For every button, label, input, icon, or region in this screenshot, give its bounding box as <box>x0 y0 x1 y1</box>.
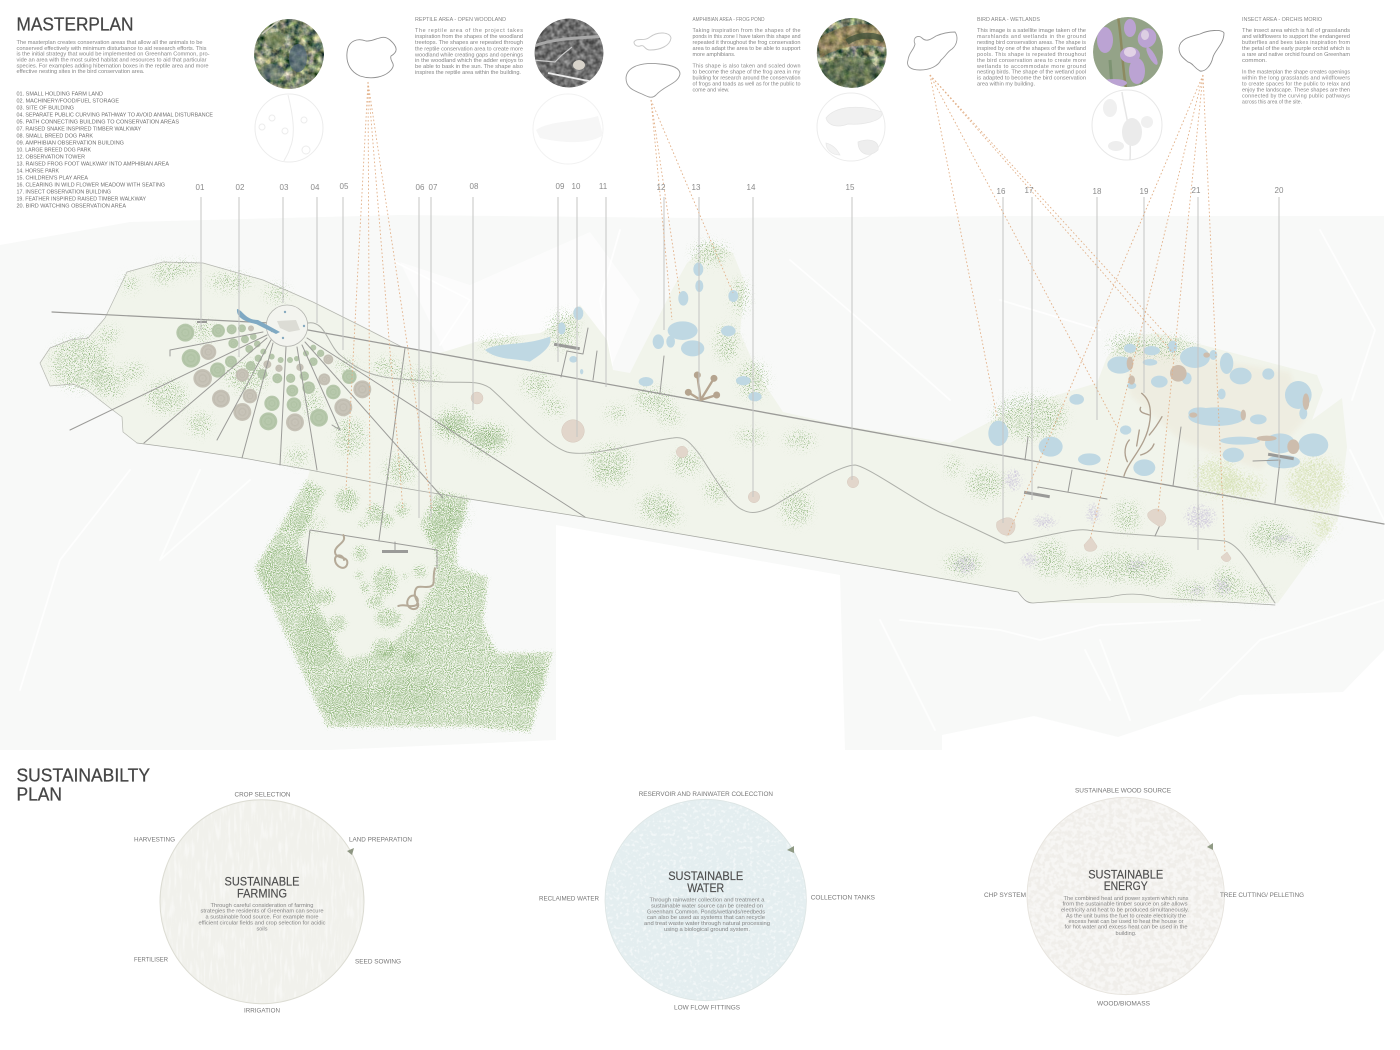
text: bird area: is adapted to become the bird conservation <box>977 76 1086 82</box>
numbered legend list: 09. AMPHIBIAN OBSERVATION BUILDING <box>16 140 124 146</box>
numbered legend list: 20. BIRD WATCHING OBSERVATION AREA <box>16 203 126 209</box>
number leader lines <box>201 197 1279 550</box>
water cycle labels: COLLECTION TANKS <box>811 894 875 902</box>
text: amphibian area: This shape is also taken and scaled down <box>692 63 800 69</box>
photo: marshland satellite image <box>817 18 888 88</box>
farming heading <box>224 877 300 900</box>
farming description <box>198 903 326 932</box>
energy cycle labels <box>984 788 1304 1008</box>
yellow meadow speckle <box>1195 458 1345 538</box>
number labels: 11 <box>599 182 608 191</box>
number labels: 18 <box>1093 187 1102 196</box>
text: insect area: connected by the curving public pathways <box>1242 94 1350 100</box>
water description: sustainable water source can be created on <box>651 904 763 910</box>
numbered legend list: 16. CLEARING IN WILD FLOWER MEADOW WITH SEATING <box>16 182 165 188</box>
water description: and treat waste water through natural processing <box>644 921 770 927</box>
text: reptile area: in the woodland which the adder enjoys to <box>415 58 523 64</box>
farming heading: SUSTAINABLE <box>224 877 300 889</box>
text: reptile area: treetops. The shapes are repeated through <box>415 40 523 46</box>
text: reptile area: the reptile conservation area to create more <box>415 46 523 52</box>
text: bird area: area within my building. <box>977 82 1035 88</box>
text: bird area: marshlands and wetlands in the ground <box>977 34 1086 40</box>
ghost trace: farmland <box>255 94 323 162</box>
numbered legend list: 10. LARGE BREED DOG PARK <box>16 147 91 153</box>
feather walkway <box>1124 393 1162 476</box>
woodland speckle <box>255 480 553 732</box>
ghost trace: orchid <box>1092 90 1162 160</box>
number labels: 13 <box>692 183 701 192</box>
energy cycle labels: SUSTAINABLE WOOD SOURCE <box>1075 788 1171 794</box>
text: amphibian area <box>692 17 801 93</box>
main site strip <box>40 242 1347 732</box>
shape: insect orchid petal outline <box>1179 30 1224 71</box>
number labels: 15 <box>846 183 855 192</box>
snake walkways <box>335 535 435 609</box>
site roads and radial paths <box>40 262 1384 605</box>
numbered legend list: 17. INSECT OBSERVATION BUILDING <box>16 189 111 195</box>
text: insect area: within the long grasslands and wildflowers <box>1241 76 1350 82</box>
water description: Greenham Common. Ponds/wetlands/reedbeds <box>647 909 765 915</box>
farming heading: FARMING <box>237 888 287 900</box>
number labels: 08 <box>470 182 479 191</box>
text: reptile area: be able to bask in the sun. The shape also <box>415 64 523 70</box>
text: amphibian area: building for research around the conservation <box>692 75 800 81</box>
photo: grey woodland aerial <box>533 18 606 88</box>
water cycle labels: RECLAIMED WATER <box>539 896 599 902</box>
energy description: The combined heat and power system which runs <box>1064 896 1189 902</box>
numbered legend list: 07. RAISED SNAKE INSPIRED TIMBER WALKWAY <box>16 126 141 132</box>
text: insect area: In the masterplan the shape creates openings <box>1242 70 1350 76</box>
text: amphibian area: come and view. <box>692 87 730 93</box>
panel: sustainable water <box>539 791 875 1012</box>
shape: amphibian pond outlines <box>626 33 680 97</box>
text: insect area: enjoy the landscape. These shapes are then <box>1242 88 1350 94</box>
text: reptile area: REPTILE AREA - OPEN WOODLAND <box>415 17 506 23</box>
text: bird area: inspired by one of the shapes of the wetland <box>977 46 1086 52</box>
text: insect area: to create spaces for the public to relax and <box>1242 82 1350 88</box>
energy cycle labels: WOOD/BIOMASS <box>1097 1000 1150 1008</box>
text: amphibian area: of frogs and toads as well as for the public to <box>692 81 800 87</box>
water cycle labels <box>539 791 875 1012</box>
panel: sustainable energy <box>984 788 1304 1008</box>
masterplan site map <box>0 75 1384 750</box>
farming cycle labels: SEED SOWING <box>355 959 401 966</box>
numbered legend list: 13. RAISED FROG FOOT WALKWAY INTO AMPHIBIAN AREA <box>16 161 169 167</box>
masterplan intro text <box>16 40 210 75</box>
meadow and tree speckle clumps <box>50 242 1315 600</box>
number labels: 01 <box>196 183 205 192</box>
shape: bird wetland outline <box>908 32 957 70</box>
masterplan intro text: vide an area with the most suited habitat and resources to aid that particular <box>16 58 207 64</box>
text: insect area: the petal of the early purple orchid which is <box>1242 46 1350 52</box>
energy cycle labels: TREE CUTTING/ PELLETING <box>1220 892 1304 899</box>
numbered legend list <box>16 91 213 209</box>
number labels <box>196 182 1284 196</box>
masterplan intro text: effective nesting sites in the bird conservation area. <box>16 69 144 75</box>
farming cycle circle <box>160 800 364 1004</box>
water description: using a biological ground system. <box>664 927 750 933</box>
farming description: a sustainable food source. For example more <box>206 915 318 921</box>
energy description: electricity and heat to be produced simultaneously. <box>1061 907 1189 913</box>
numbered legend list: 01. SMALL HOLDING FARM LAND <box>16 91 103 97</box>
orange dotted inspiration lines <box>346 75 1225 553</box>
number labels: 06 <box>416 183 425 192</box>
number labels: 20 <box>1275 186 1284 195</box>
text: reptile area <box>414 17 523 76</box>
text: reptile area: The reptile area of the project takes <box>415 28 523 34</box>
number labels: 09 <box>556 182 565 191</box>
text: bird area <box>976 17 1086 88</box>
observation buildings <box>197 321 1294 553</box>
ghost trace: woodland <box>533 94 603 164</box>
text: bird area: the bird conservation area to create more <box>977 58 1086 64</box>
circular crop fields <box>176 324 371 431</box>
number labels: 07 <box>429 183 438 192</box>
farming cycle labels: FERTILISER <box>134 956 168 963</box>
text: insect area: and wildflowers to support the endangered <box>1242 34 1350 40</box>
number labels: 21 <box>1192 186 1201 195</box>
number labels: 05 <box>340 182 349 191</box>
water heading: WATER <box>687 883 724 895</box>
number labels: 12 <box>657 183 666 192</box>
water cycle labels: LOW FLOW FITTINGS <box>674 1004 740 1012</box>
farming description: strategies the residents of Greenham can secure <box>200 909 324 915</box>
water description: Through rainwater collection and treatment a <box>650 897 764 903</box>
purple wildflower speckle <box>953 470 1297 595</box>
shape: reptile treetop outline <box>347 37 396 78</box>
number labels: 10 <box>572 182 581 191</box>
water description: can also be used as systems that can recycle <box>647 915 765 921</box>
text: amphibian area: AMPHIBIAN AREA - FROG POND <box>692 17 765 23</box>
number labels: 17 <box>1025 186 1034 195</box>
energy heading: ENERGY <box>1104 881 1148 893</box>
energy description <box>1061 896 1189 937</box>
water heading <box>668 871 744 895</box>
text: bird area: BIRD AREA - WETLANDS <box>977 17 1040 23</box>
text: reptile area: woodland while creating gaps and openings <box>414 52 523 58</box>
text: reptile area: inspiration from the shapes of the woodland <box>415 34 523 40</box>
text: insect area: INSECT AREA - ORCHIS MORIO <box>1242 17 1322 23</box>
energy cycle labels: CHP SYSTEM <box>984 892 1026 899</box>
farming description: efficient circular fields and crop selection for acidic <box>198 920 326 926</box>
surrounding context ghost map <box>0 215 1384 750</box>
farming cycle labels: LAND PREPARATION <box>349 837 412 844</box>
text: amphibian area: to become the shape of the frog area in my <box>692 69 801 75</box>
text: amphibian area: area to adapt the area to be able to support <box>692 46 801 52</box>
title: sustainability plan: PLAN <box>16 784 62 804</box>
wetland tan wash <box>1125 345 1305 470</box>
text: reptile area: inspires the reptile area within the building. <box>415 70 521 76</box>
text: bird area: nesting birds. The shape of the wetland pool <box>977 70 1086 76</box>
text: insect area: butterflies and bees takes inspiration from <box>1242 40 1350 46</box>
farming description: soils <box>256 926 268 932</box>
central building hub <box>237 305 308 346</box>
text: bird area: wetlands to accommodate more ground <box>976 64 1086 70</box>
photo: purple orchid <box>1093 17 1163 88</box>
numbered legend list: 05. PATH CONNECTING BUILDING TO CONSERVATION AREAS <box>16 119 179 125</box>
number labels: 16 <box>997 187 1006 196</box>
energy description: for hot water and excess heat can be used in the <box>1064 925 1188 931</box>
ponds: central and amphibian area <box>485 263 762 401</box>
panel: sustainable farming <box>134 792 412 1015</box>
text: amphibian area: more amphibians. <box>692 52 736 58</box>
text: amphibian area: Taking inspiration from the shapes of the <box>692 28 800 34</box>
frog foot walkway <box>686 373 719 400</box>
farming cycle labels: CROP SELECTION <box>234 792 291 798</box>
title: masterplan: MASTERPLAN <box>16 14 134 34</box>
text: bird area: This image is a satellite image taken of the <box>977 28 1086 34</box>
energy cycle circle <box>1027 797 1224 995</box>
farming cycle labels: IRRIGATION <box>244 1008 280 1015</box>
numbered legend list: 14. HORSE PARK <box>16 168 59 174</box>
numbered legend list: 19. FEATHER INSPIRED RAISED TIMBER WALKWAY <box>16 196 146 202</box>
title: sustainability plan <box>16 766 150 804</box>
masterplan intro text: species. For examples adding hibernation boxes in the reptile area and more <box>16 64 208 70</box>
number labels: 02 <box>236 183 245 192</box>
ghost trace: marshland <box>817 93 885 161</box>
energy description: from the sustainable timber source on site allows <box>1062 902 1188 908</box>
energy heading <box>1088 870 1164 893</box>
photo: farmland satellite image <box>254 19 324 89</box>
water description <box>644 897 770 933</box>
numbered legend list: 04. SEPARATE PUBLIC CURVING PATHWAY TO AVOID ANIMAL DISTURBANCE <box>16 112 213 118</box>
text: bird area: pools. This shape is repeated throughout <box>977 52 1086 58</box>
text: bird area: nesting bird conservation areas. The shape is <box>977 40 1086 46</box>
text: amphibian area: repeated it throughout the frog conservation <box>692 40 800 46</box>
masterplan intro text: is the initial strategy that would be implemented on Greenham Common, pro- <box>16 52 210 58</box>
farming description: Through careful consideration of farming <box>210 903 314 909</box>
ponds: bird wetland area <box>988 341 1328 476</box>
masterplan intro text: conserved effectively with minimum disturbance to aid research efforts. This <box>16 46 207 52</box>
farming cycle labels: HARVESTING <box>134 837 175 844</box>
numbered legend list: 12. OBSERVATION TOWER <box>16 154 85 160</box>
numbered legend list: 08. SMALL BREED DOG PARK <box>16 133 93 139</box>
energy description: excess heat can be used to heat the house or <box>1068 919 1184 925</box>
title: sustainability plan: SUSTAINABILTY <box>16 766 150 786</box>
masterplan intro text: The masterplan creates conservation areas that allow all the animals to be <box>16 40 202 46</box>
text: insect area: The insect area which is full of grasslands <box>1242 28 1350 34</box>
numbered legend list: 15. CHILDREN'S PLAY AREA <box>16 175 88 181</box>
text: insect area: across this area of the site. <box>1242 100 1302 106</box>
numbered legend list: 03. SITE OF BUILDING <box>16 105 74 111</box>
energy heading: SUSTAINABLE <box>1088 870 1164 882</box>
energy description: building. <box>1116 931 1136 937</box>
clearing seating circles <box>471 392 1231 562</box>
number labels: 04 <box>311 183 320 192</box>
numbered legend list: 02. MACHINERY/FOOD/FUEL STORAGE <box>16 98 119 104</box>
number labels: 14 <box>747 183 756 192</box>
text: amphibian area: ponds in this zone I have taken this shape and <box>692 34 800 40</box>
text: insect area <box>1241 17 1351 106</box>
number labels: 19 <box>1140 187 1149 196</box>
text: insect area: common. <box>1242 58 1267 64</box>
number labels: 03 <box>280 183 289 192</box>
energy description: As the unit burns the fuel to create electricity the <box>1066 913 1186 919</box>
water heading: SUSTAINABLE <box>668 871 744 883</box>
farming cycle labels <box>134 792 412 1015</box>
water cycle labels: RESERVOIR AND RAINWATER COLECCTION <box>639 791 773 798</box>
water cycle circle <box>605 799 806 1001</box>
text: insect area: a rare and native orchid found on Greenham <box>1242 52 1351 58</box>
